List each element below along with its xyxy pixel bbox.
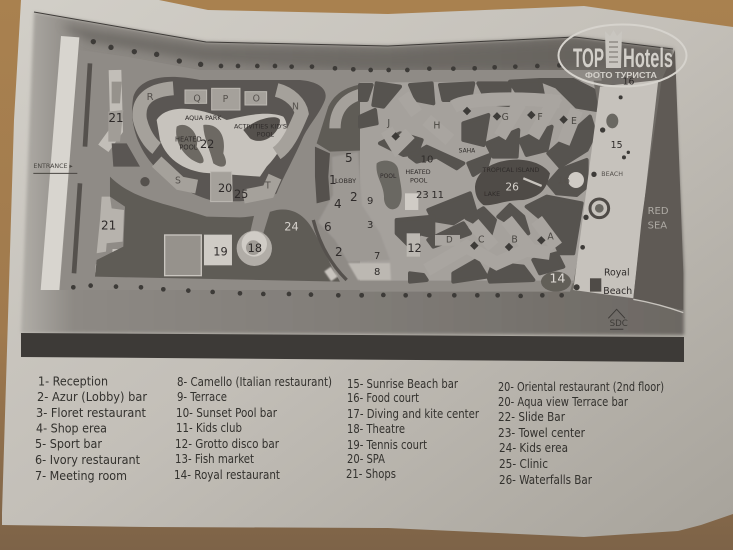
left map labels: O (253, 93, 260, 104)
dark footer band (21, 333, 684, 362)
top shops block (103, 70, 123, 148)
garden upper-left (112, 143, 140, 167)
right map labels: 12 (407, 241, 422, 255)
TOP Hotels watermark logo: Hotels (623, 43, 673, 73)
right map labels (380, 77, 669, 297)
top road (360, 70, 602, 83)
right map labels: 16 (623, 77, 635, 88)
legend column 2: 8- Camello (Italian restaurant) (177, 375, 332, 389)
left map labels: 21 (101, 218, 116, 232)
legend column 4: 20- Oriental restaurant (2nd floor) (498, 380, 664, 394)
tree rows (71, 39, 364, 298)
right map labels: SEA (648, 221, 667, 232)
legend column 3: 15- Sunrise Beach bar (347, 377, 458, 391)
left map labels: 18 (248, 241, 262, 255)
aqua park pools (176, 117, 280, 167)
hotel blocks R S T N (139, 88, 302, 197)
legend column 3: 20- SPA (347, 452, 386, 466)
lobby building (318, 152, 391, 281)
legend column 3: 16- Food court (347, 391, 419, 405)
right map labels: 10 (421, 155, 433, 166)
lobby labels: 7 (374, 251, 380, 262)
lobby labels: 4 (334, 197, 342, 211)
right map labels: 16 (557, 175, 570, 186)
legend column 2 (174, 375, 332, 482)
royal restaurant 14 (541, 272, 571, 292)
legend column 1: 7- Meeting room (35, 469, 127, 483)
parking strips (74, 63, 90, 273)
road to theatre (250, 212, 270, 233)
legend column 2: 11- Kids club (176, 421, 242, 435)
lobby labels: 9 (367, 196, 373, 207)
legend column 2: 14- Royal restaurant (174, 468, 280, 482)
left map labels: S (175, 175, 181, 186)
right map labels: SAHA (459, 148, 476, 155)
aqua park backing (132, 77, 326, 201)
land and roads (60, 50, 370, 290)
left map labels: HEATED (175, 136, 202, 144)
bottom road (360, 281, 573, 292)
map panel (21, 12, 684, 362)
lower shops block (97, 197, 124, 253)
pool (376, 161, 402, 209)
legend column 4: 26- Waterfalls Bar (499, 473, 592, 487)
left map labels: P (223, 94, 229, 105)
diagonal garden strip (313, 220, 347, 280)
legend column 3: 17- Diving and kite center (347, 407, 479, 421)
legend column 4: 25- Clinic (499, 457, 548, 471)
left map labels (33, 92, 299, 258)
right map labels: Beach (603, 286, 632, 297)
lobby labels: LOBBY (335, 177, 356, 185)
lobby labels: 3 (367, 220, 373, 231)
hotel blocks Q P O 20 (185, 88, 267, 202)
left map labels: R (147, 92, 154, 103)
legend column 3 (346, 377, 479, 481)
left map labels: 22 (200, 137, 214, 151)
right map labels: G (502, 112, 509, 123)
right map labels: LAKE (484, 191, 500, 198)
right map labels: J (386, 118, 390, 129)
legend column 1: 2- Azur (Lobby) bar (37, 390, 147, 404)
logo building icon (605, 30, 622, 68)
lower garden (95, 177, 340, 282)
left map labels: AQUA PARK (185, 115, 222, 122)
left map labels: POOL (257, 132, 274, 139)
left map labels: T (264, 181, 271, 192)
legend column 1: 1- Reception (38, 374, 108, 388)
lobby labels: 2 (335, 245, 343, 259)
legend column 4 (498, 380, 664, 487)
legend column 4: 22- Slide Bar (498, 410, 565, 424)
right map labels: 11 (431, 190, 444, 201)
legend column 2: 9- Terrace (177, 390, 227, 404)
right map labels: 14 (549, 271, 565, 286)
legend column 4: 23- Towel center (498, 426, 585, 440)
shoreline (633, 299, 683, 313)
SDC logo: SDC (610, 319, 628, 329)
right map labels: Royal (604, 267, 630, 278)
curved block near J (335, 93, 370, 128)
red sea (633, 50, 683, 310)
garden beds (360, 80, 597, 282)
lobby labels: 1 (329, 173, 337, 187)
left map labels: 20 (218, 181, 232, 195)
block D and grotto (405, 193, 460, 257)
legend column 1: 4- Shop erea (36, 422, 107, 436)
right map labels: H (433, 121, 440, 132)
lobby labels: 8 (374, 267, 380, 278)
legend column 1 (35, 374, 147, 483)
left map labels: POOL (179, 143, 198, 151)
legend column 3: 19- Tennis court (347, 438, 427, 452)
right map labels: 23 (416, 190, 429, 201)
right map labels: B (511, 235, 518, 246)
aqua park light deck (157, 109, 287, 177)
darker upper band (60, 25, 672, 70)
left map labels: 21 (108, 111, 124, 125)
tennis court 19 (204, 235, 232, 265)
right land backing (360, 79, 600, 283)
left map labels: ENTRANCE ▸ (33, 163, 74, 170)
roundabout (140, 177, 150, 186)
lower small buildings (96, 250, 140, 272)
left map labels: 19 (213, 244, 228, 258)
legend column 2: 12- Grotto disco bar (175, 437, 279, 451)
left map labels: ACTIVITIES KID'S (234, 124, 287, 131)
legend column 3: 18- Theatre (347, 422, 405, 436)
logo caption: ФОТО ТУРИСТА (585, 71, 657, 80)
legend column 1: 3- Floret restaurant (36, 406, 146, 420)
legend column 4: 20- Aqua view Terrace bar (498, 395, 628, 409)
right map labels: RED (648, 206, 669, 217)
lobby labels: 5 (345, 151, 353, 165)
right map labels: 15 (611, 140, 623, 151)
logo wordmark: TOP (573, 43, 604, 73)
left map labels: Q (193, 93, 201, 104)
legend column 2: 10- Sunset Pool bar (176, 406, 277, 420)
SDC logo (608, 309, 628, 329)
beach features (568, 95, 630, 292)
apartment blocks (387, 95, 577, 270)
island bridge (523, 178, 542, 186)
legend column 1: 5- Sport bar (35, 437, 102, 451)
map top edge line (34, 12, 673, 49)
left map labels: N (292, 101, 299, 112)
map speckled background (21, 12, 684, 335)
garden beside central road (315, 147, 330, 203)
right map labels: POOL (380, 173, 397, 180)
right map labels: TROPICAL ISLAND (482, 167, 539, 174)
tree rows (359, 63, 564, 298)
right map labels: F (537, 112, 543, 123)
theatre 18 (237, 231, 272, 266)
legend (35, 374, 664, 487)
legend column 2: 13- Fish market (175, 452, 254, 466)
lake (475, 160, 550, 205)
legend column 4: 24- Kids erea (499, 441, 568, 455)
right map labels: HEATED (405, 169, 431, 176)
right map labels: BEACH (601, 171, 623, 178)
right map labels: 26 (505, 181, 519, 194)
large court (165, 235, 201, 276)
lobby labels: 6 (324, 220, 332, 234)
right map labels: A (547, 231, 554, 242)
legend column 1: 6- Ivory restaurant (35, 453, 140, 467)
left complex drawing (33, 36, 375, 298)
right complex drawing (359, 50, 683, 329)
diamonds (391, 107, 568, 251)
lobby labels (324, 151, 380, 278)
entrance strip (41, 36, 79, 290)
left map labels: 24 (284, 220, 299, 234)
right map labels: E (571, 116, 577, 127)
block J backing (317, 83, 375, 152)
beach (573, 80, 658, 298)
entrance line (33, 172, 77, 175)
lobby labels: 2 (350, 190, 358, 204)
TOP Hotels watermark logo (558, 24, 686, 86)
left map labels: 25 (234, 187, 248, 201)
right map labels: D (446, 236, 453, 246)
right map labels: C (478, 235, 485, 246)
legend column 3: 21- Shops (346, 467, 396, 481)
right map labels: POOL (410, 178, 428, 185)
